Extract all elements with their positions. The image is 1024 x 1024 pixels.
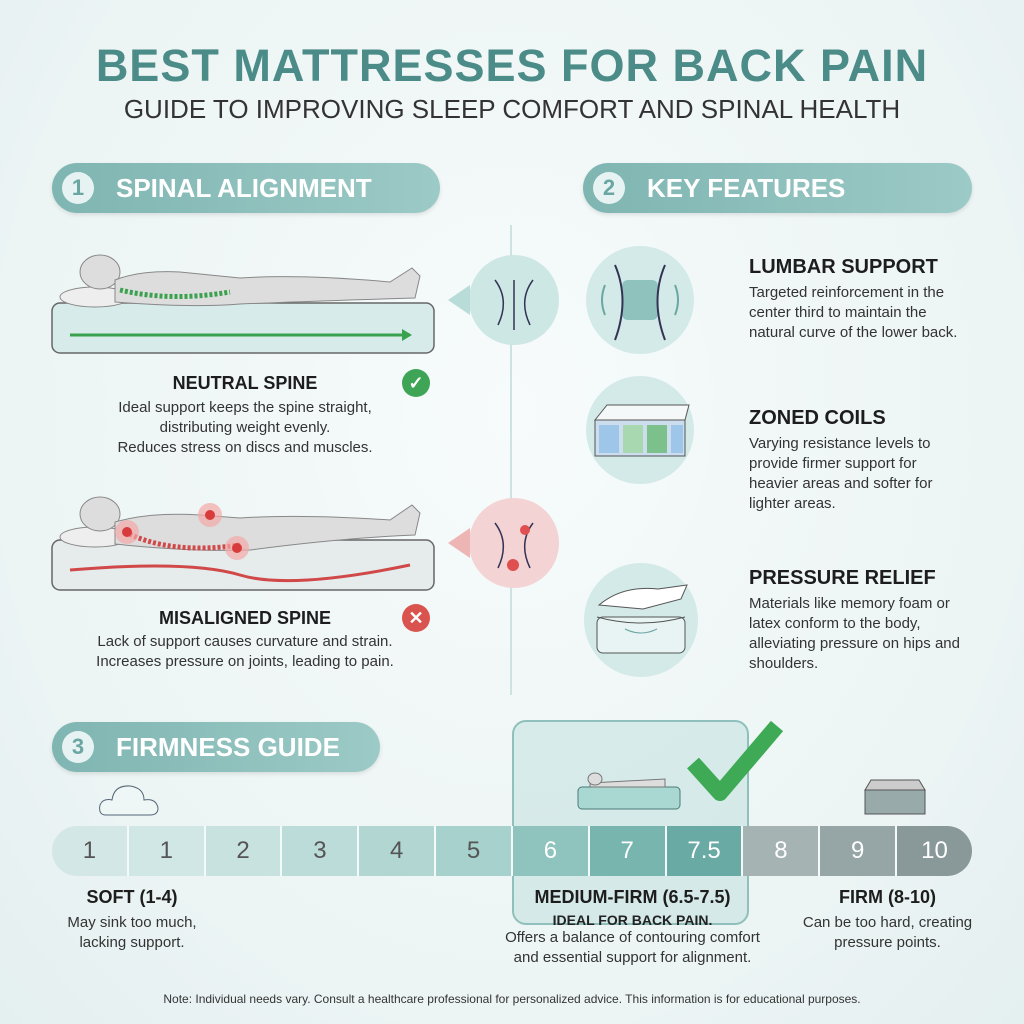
firmness scale bar: 10 xyxy=(921,837,948,864)
lumbar support text: Targeted reinforcement in the center third to maintain the natural curve of the lower back. xyxy=(749,284,957,341)
firmness scale bar: 7.5 xyxy=(687,837,721,864)
firm label: FIRM (8-10) xyxy=(839,887,936,907)
icon: pressure relief xyxy=(584,563,698,677)
firmness scale bar: 8 xyxy=(774,837,788,864)
lumbar support text xyxy=(749,256,957,341)
neutral spine text xyxy=(117,373,373,456)
icon: red x: ✕ xyxy=(408,608,424,628)
section 3 header xyxy=(52,722,380,772)
firmness scale bar: 4 xyxy=(390,837,403,864)
neutral spine text: distributing weight evenly. xyxy=(160,419,330,436)
misaligned spine text: Increases pressure on joints, leading to pain. xyxy=(96,653,394,670)
icon: green check xyxy=(402,369,430,397)
soft label: lacking support. xyxy=(79,934,185,951)
zoned coils text: Varying resistance levels to provide firmer support for heavier areas and softer for lighter areas. xyxy=(749,435,932,512)
medium-firm label: and essential support for alignment. xyxy=(514,949,751,966)
soft label: May sink too much, xyxy=(67,914,197,931)
misaligned spine text xyxy=(96,608,394,670)
section 1 header: 1 xyxy=(72,175,84,200)
section 1 header xyxy=(52,163,440,213)
icon: pain back circle xyxy=(448,498,559,588)
soft label: SOFT (1-4) xyxy=(86,887,178,907)
medium-firm label: MEDIUM-FIRM (6.5-7.5) xyxy=(534,887,730,907)
icon: red x xyxy=(402,604,430,632)
footer note: Note: Individual needs vary. Consult a healthcare professional for personalized advice. This information is for educational purposes. xyxy=(163,992,861,1006)
medium-firm label: IDEAL FOR BACK PAIN. xyxy=(553,912,712,928)
neutral spine text: NEUTRAL SPINE xyxy=(173,373,317,393)
firm label xyxy=(803,887,972,951)
medium-firm highlight box xyxy=(512,720,749,925)
firm label: Can be too hard, creating xyxy=(803,914,972,931)
section 3 header: 3 xyxy=(72,734,84,759)
icon: zoned coils xyxy=(586,376,694,484)
medium-firm label: Offers a balance of contouring comfort xyxy=(505,929,760,946)
illustration: neutral spine mattress xyxy=(51,254,559,354)
icon: green check: ✓ xyxy=(408,373,424,393)
icon: mattress with person xyxy=(578,772,680,810)
firm label: pressure points. xyxy=(834,934,941,951)
firmness scale bar: 1 xyxy=(83,837,96,864)
firmness scale bar: 9 xyxy=(851,837,864,864)
firmness scale bar: 2 xyxy=(236,837,250,864)
misaligned spine text: MISALIGNED SPINE xyxy=(159,608,331,628)
medium-firm label xyxy=(505,887,760,966)
section 2 header: 2 xyxy=(603,175,615,200)
title: BEST MATTRESSES FOR BACK PAIN xyxy=(96,40,928,91)
lumbar support text: LUMBAR SUPPORT xyxy=(749,256,938,278)
firmness scale bar xyxy=(52,826,972,876)
pressure relief text: PRESSURE RELIEF xyxy=(749,567,936,589)
firmness scale bar: 3 xyxy=(313,837,327,864)
icon: lumbar support xyxy=(586,246,694,354)
firmness scale bar: 6 xyxy=(544,837,557,864)
subtitle: GUIDE TO IMPROVING SLEEP COMFORT AND SPINAL HEALTH xyxy=(124,94,900,124)
section 1 header: SPINAL ALIGNMENT xyxy=(116,172,372,202)
icon: firm block xyxy=(864,780,926,814)
icon: big check xyxy=(687,720,783,801)
misaligned spine text: Lack of support causes curvature and strain. xyxy=(97,633,393,650)
firmness scale bar: 1 xyxy=(160,837,173,864)
icon: neutral back circle xyxy=(448,255,559,345)
section 2 header xyxy=(583,163,972,213)
neutral spine text: Ideal support keeps the spine straight, xyxy=(118,399,372,416)
icon: cloud xyxy=(99,785,158,816)
section 2 header: KEY FEATURES xyxy=(647,172,845,202)
soft label xyxy=(67,887,197,951)
illustration: misaligned spine mattress xyxy=(51,496,559,591)
pressure relief text: Materials like memory foam or latex conform to the body, alleviating pressure on hips and shoulders. xyxy=(749,595,960,672)
zoned coils text: ZONED COILS xyxy=(749,407,886,429)
section 3 header: FIRMNESS GUIDE xyxy=(116,732,340,762)
neutral spine text: Reduces stress on discs and muscles. xyxy=(117,439,373,456)
firmness scale bar: 7 xyxy=(621,837,634,864)
firmness scale bar: 5 xyxy=(467,837,480,864)
